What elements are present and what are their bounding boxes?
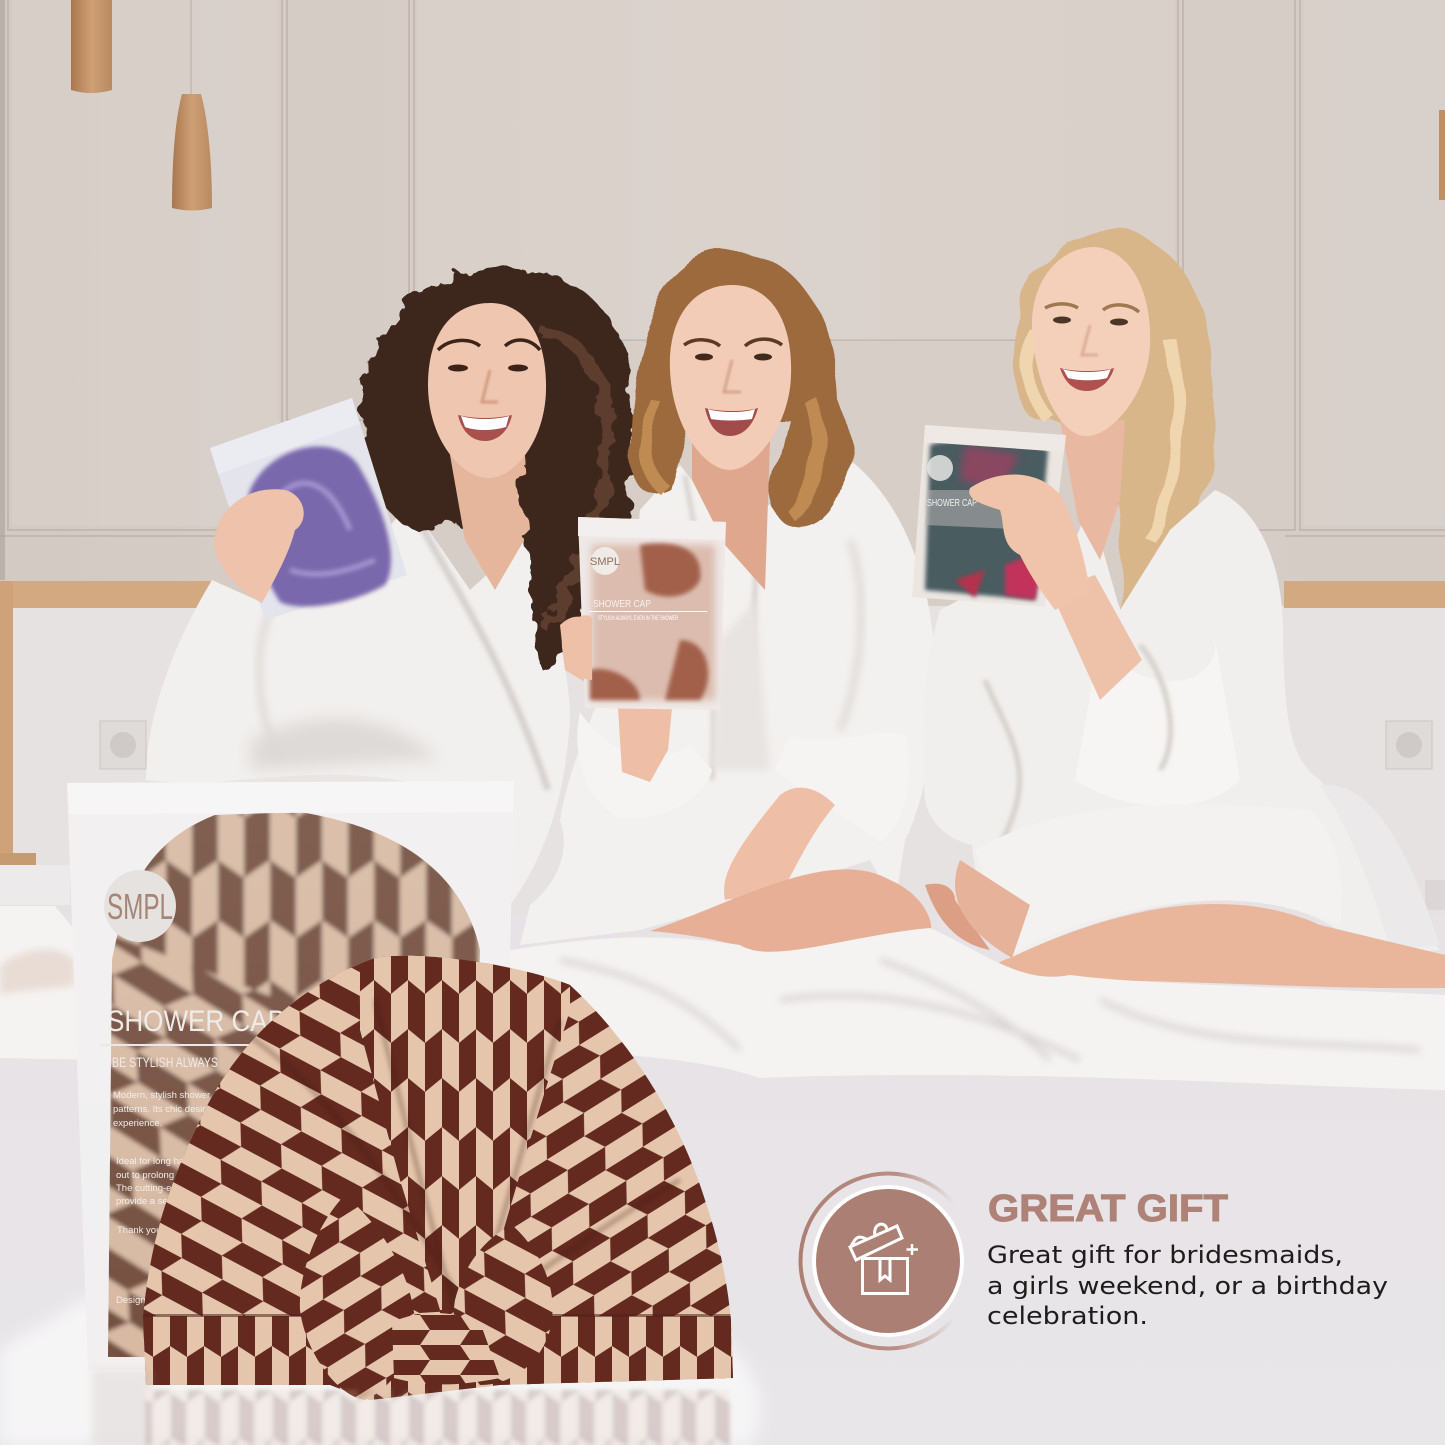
woman right: bathrobe <box>923 490 1440 958</box>
bag title: SHOWER CAP <box>107 1005 285 1038</box>
package: rose gold cap bag: STYLISH ALWAYS, EVEN IN THE SHOWER <box>598 616 678 622</box>
bed: mattress <box>0 1050 1445 1445</box>
cap left sweep <box>143 956 440 1328</box>
woman right: hand on bag <box>969 474 1090 610</box>
background: bedroom wall <box>0 0 1445 610</box>
woman left: bathrobe <box>146 500 570 905</box>
badge outer ring <box>800 1174 976 1348</box>
package: rose gold cap bag <box>578 517 726 710</box>
woman middle: bathrobe <box>520 460 935 945</box>
cap bow left lobe <box>300 1195 416 1400</box>
woman right: arm and neck <box>1050 420 1142 700</box>
package: rose gold cap bag: SHOWER CAP <box>593 599 651 610</box>
woman left: face <box>428 303 546 478</box>
cap bow right lobe <box>454 1225 553 1385</box>
text block: gift description: Great gift for bridesmaids, <box>987 1241 1343 1269</box>
pendant lamps <box>71 0 1445 210</box>
heading: great gift: GREAT GIFT <box>988 1188 1228 1230</box>
blurred cap inside bag <box>100 805 490 1365</box>
cap bow knot <box>392 1313 500 1384</box>
wooden headboard rail and lower wall <box>0 581 1445 916</box>
cap band <box>130 1316 750 1400</box>
bag copy: patterns. Its chic design <box>113 1104 213 1115</box>
woman middle: sleeve cuffs <box>577 712 909 842</box>
bag copy: Ideal for long hair, <box>116 1156 192 1167</box>
bag copy: Thank you f <box>117 1225 167 1236</box>
woman right: legs <box>955 860 1445 988</box>
icon: open gift box <box>850 1224 918 1294</box>
icon: wall socket right <box>1386 721 1432 769</box>
bag copy: provide a secu <box>116 1196 178 1207</box>
woman left: back hair <box>363 268 634 665</box>
bag copy: experience. <box>113 1118 162 1129</box>
woman middle: face <box>670 285 791 470</box>
cap centre vertical stripes <box>360 940 570 1310</box>
icon: wall socket left <box>100 721 146 769</box>
white floor reflection <box>0 1300 760 1445</box>
text block: gift description <box>987 1241 1388 1330</box>
text block: gift description: celebration. <box>987 1302 1148 1330</box>
bag copy: The cutting-edge <box>116 1183 187 1194</box>
callout: great gift badge <box>800 1174 976 1348</box>
woman left: front hair locks <box>364 330 632 668</box>
logo badge <box>104 870 176 942</box>
woman middle: neck and chest <box>692 440 770 590</box>
bed: white duvet <box>0 906 1445 1090</box>
text block: gift description: a girls weekend, or a birthday <box>987 1272 1388 1300</box>
bag copy <box>113 1090 218 1306</box>
woman left: neck and chest <box>450 455 530 590</box>
bag copy: Designed <box>116 1295 156 1306</box>
woman left: hand on bag <box>214 489 304 603</box>
bag subtitle: BE STYLISH ALWAYS <box>112 1054 218 1070</box>
woman middle: fingers on bag <box>562 615 592 680</box>
woman right: hair <box>1017 230 1216 610</box>
package: rose gold cap bag: SMPL <box>590 556 620 568</box>
badge disc <box>814 1187 962 1335</box>
bag copy: Modern, stylish shower c <box>113 1090 218 1101</box>
package: floral cap bag <box>912 425 1066 607</box>
fold shading <box>240 1000 680 1312</box>
woman middle: legs <box>650 869 990 965</box>
woman middle: hair <box>628 252 852 526</box>
bag copy: out to prolong blo <box>116 1170 189 1181</box>
package: floral cap bag: SHOWER CAP <box>927 498 977 509</box>
product: patterned shower cap <box>130 940 750 1400</box>
package: purple cap bag <box>210 398 407 620</box>
logo badge: SMPL <box>107 886 173 927</box>
woman middle: arm and hand <box>560 617 835 900</box>
cap and bag reflection <box>92 1370 730 1445</box>
package: large frosted bag <box>67 781 514 1370</box>
woman right: face <box>1032 247 1150 436</box>
